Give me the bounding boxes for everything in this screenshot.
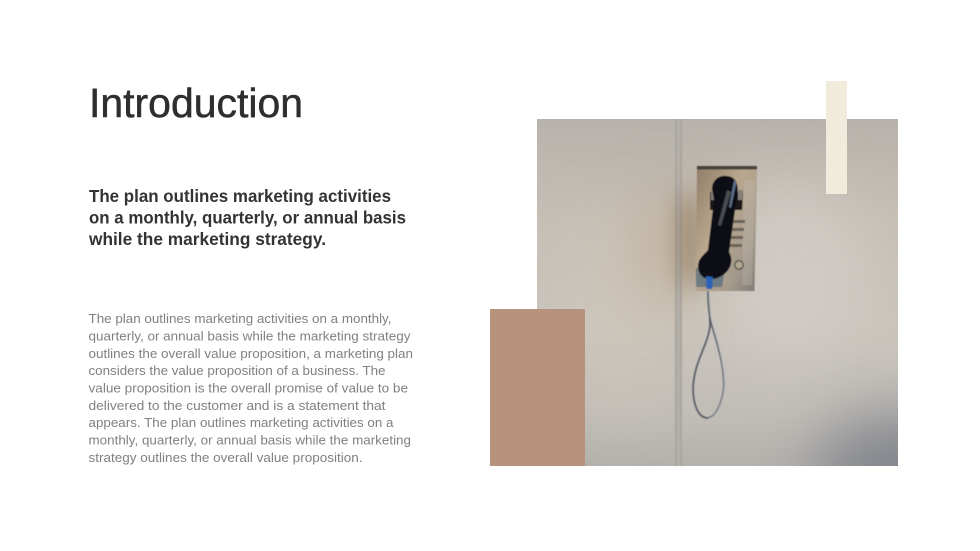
subheading: on a monthly, quarterly, or annual basis [89, 208, 406, 228]
coiled cord [693, 291, 724, 418]
pink accent block [490, 309, 585, 466]
body text: The plan outlines marketing activities on a monthly, [88, 311, 392, 326]
phone shadow [680, 188, 700, 292]
keypad [729, 220, 745, 247]
body text: value proposition is the overall promise of value to be [88, 380, 408, 396]
body text [88, 311, 413, 465]
body text: considers the value proposition of a business. The [88, 363, 386, 378]
subheading: The plan outlines marketing activities [89, 186, 391, 206]
photo: wall-mounted telephone [537, 119, 898, 466]
cream accent bar [826, 81, 847, 194]
subheading: while the marketing strategy. [88, 229, 326, 249]
handset [698, 176, 738, 279]
body text: strategy outlines the overall value proposition. [88, 450, 362, 465]
body text: outlines the overall value proposition, a marketing plan [88, 346, 413, 361]
body text: appears. The plan outlines marketing activities on a [88, 415, 394, 430]
body text: delivered to the customer and is a statement that [88, 398, 386, 413]
body text: monthly, quarterly, or annual basis while the marketing [88, 432, 411, 448]
body text: quarterly, or annual basis while the marketing strategy [88, 328, 411, 344]
button [735, 261, 743, 269]
blue cable collar [706, 276, 713, 289]
phone plate [696, 166, 757, 291]
title: Introduction [89, 80, 303, 126]
wall seam [675, 110, 682, 475]
handset cradle [710, 192, 743, 210]
subheading [88, 186, 406, 249]
